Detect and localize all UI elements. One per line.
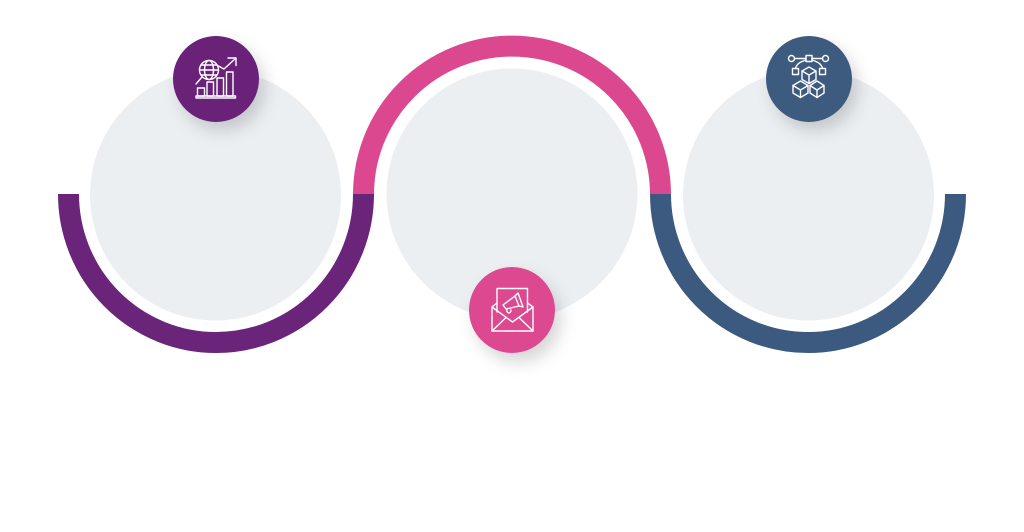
icon: globe and bar chart [196, 58, 236, 98]
panel: right circle [683, 70, 934, 320]
icon: bezier curve and cubes [788, 56, 828, 98]
badge: pink email marketing [469, 267, 555, 353]
arc: centre pink [364, 46, 660, 194]
arc: left purple [68, 194, 364, 343]
arc: right blue [660, 194, 956, 343]
badge: blue design blocks [766, 36, 852, 122]
panel: left circle [90, 70, 341, 320]
badge: purple analytics [173, 36, 259, 122]
panel: centre circle [386, 68, 638, 320]
icon: envelope with megaphone [492, 288, 533, 331]
